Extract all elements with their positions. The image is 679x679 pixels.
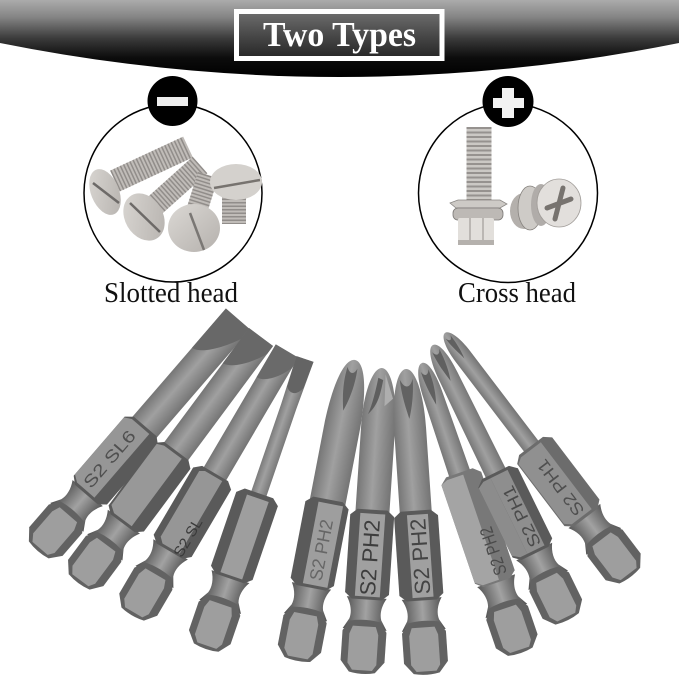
bit: cross PH1 a: S2 PH1	[499, 483, 545, 550]
header band	[0, 0, 679, 77]
circle frame	[84, 104, 262, 282]
bit: cross PH1 b: S2 PH1	[533, 455, 588, 519]
panel: cross head	[418, 76, 598, 309]
icon: plus badge	[482, 76, 534, 127]
title box	[236, 12, 442, 58]
title box: Two Types	[263, 15, 416, 54]
label: slotted head: Slotted head	[104, 278, 238, 309]
bit: cross PH2 b	[340, 367, 404, 675]
panel: slotted head	[83, 76, 262, 309]
label: cross head: Cross head	[458, 278, 576, 309]
bit: cross PH1 b	[427, 320, 648, 590]
bit: cross PH2 d	[401, 356, 542, 660]
bit: cross PH2 a	[275, 356, 377, 665]
cross head screws photo	[450, 127, 581, 245]
slotted screws photo	[83, 147, 262, 252]
bit: cross PH2 b: S2 PH2	[355, 519, 385, 596]
bit: slotted 2	[61, 324, 279, 596]
bit: cross PH2 c	[384, 368, 449, 676]
bit: slotted 3	[113, 340, 306, 626]
bit: slotted S2 SL6: S2 SL6	[80, 427, 140, 492]
bit: slotted S2 SL6	[21, 305, 255, 565]
bit: slotted 4	[185, 352, 326, 656]
bit: cross PH2 d: S2 PH2	[476, 524, 511, 578]
bit: cross PH2 a: S2 PH2	[306, 518, 337, 582]
circle frame	[418, 104, 598, 282]
bit: slotted 3: S2 SL	[170, 515, 206, 560]
bit: cross PH1 a	[413, 335, 588, 630]
icon: minus badge	[148, 76, 198, 126]
bit: cross PH2 c: S2 PH2	[405, 518, 435, 595]
